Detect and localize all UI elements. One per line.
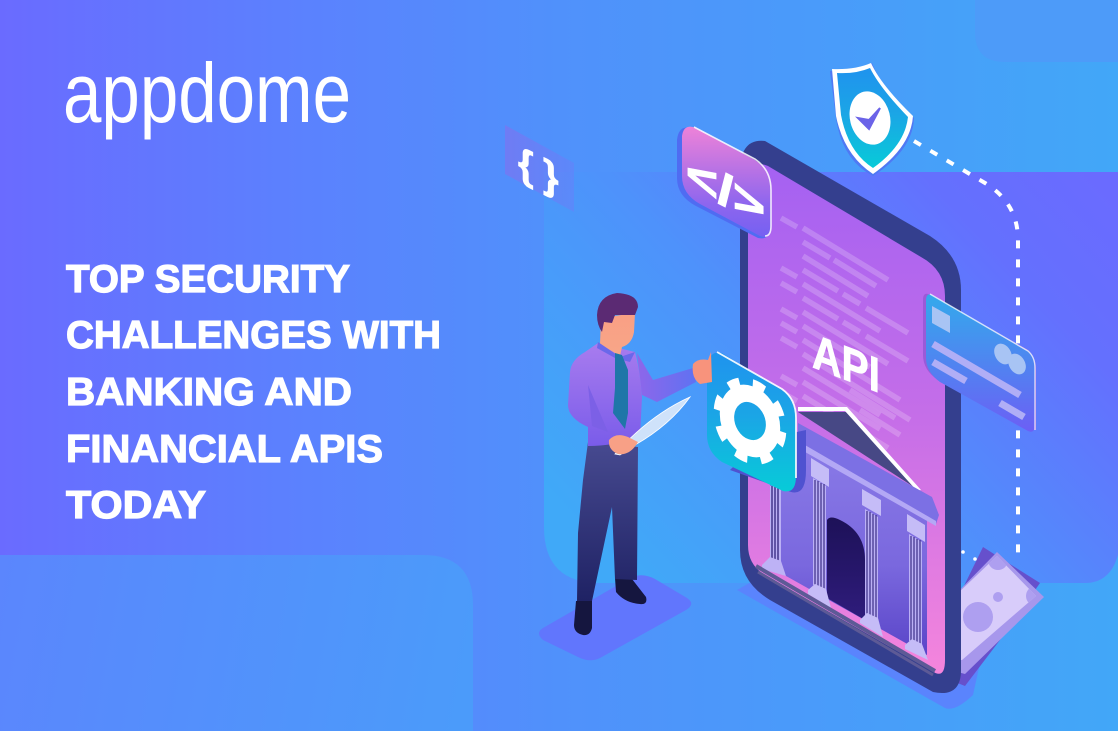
forearm xyxy=(637,353,696,402)
panel: central gradient block xyxy=(544,172,1118,583)
icon: code tile xyxy=(677,127,771,238)
hand on gear xyxy=(693,352,712,384)
column: second xyxy=(808,458,831,608)
code text lines on screen xyxy=(781,218,910,448)
gear xyxy=(716,374,784,468)
entablature xyxy=(798,423,939,524)
bank building xyxy=(756,407,939,675)
collar xyxy=(597,342,635,362)
title xyxy=(66,258,441,527)
icon: banknotes xyxy=(958,547,1044,686)
trousers xyxy=(577,442,638,601)
icon: curly braces tile: { xyxy=(518,138,534,190)
title: BANKING AND xyxy=(66,371,352,414)
logo: appdome: appdome xyxy=(63,46,351,140)
icon: curly braces tile: } xyxy=(543,150,559,202)
phone screen xyxy=(748,164,945,674)
phone screen label: API xyxy=(812,323,880,404)
man ground shadow xyxy=(539,575,691,660)
shoes xyxy=(615,578,646,604)
icon: curly braces tile xyxy=(505,125,574,212)
title: TOP SECURITY xyxy=(66,258,350,301)
column: first xyxy=(762,486,786,576)
pediment xyxy=(798,412,920,491)
neck and face xyxy=(600,313,635,356)
phone ground shadow xyxy=(737,560,985,709)
column: fourth xyxy=(905,514,928,660)
panel: bottom-left rounded block xyxy=(0,555,473,731)
title: FINANCIAL APIS xyxy=(66,428,383,471)
shirt xyxy=(568,343,642,446)
title: CHALLENGES WITH xyxy=(66,314,441,357)
title: TODAY xyxy=(66,484,206,527)
man xyxy=(568,293,712,635)
steps xyxy=(756,566,935,671)
icon: credit card xyxy=(923,294,1036,432)
tie xyxy=(613,353,628,429)
phone xyxy=(740,141,961,693)
building body xyxy=(770,430,927,655)
icon: gear tile xyxy=(707,352,806,492)
panel: top-right rounded block xyxy=(975,0,1118,62)
door xyxy=(827,518,865,620)
dashed connector line xyxy=(914,141,1018,562)
column: third xyxy=(860,489,883,637)
icon: code tile: </> xyxy=(686,146,765,237)
icon: security shield xyxy=(830,63,914,176)
phone body xyxy=(740,141,961,693)
hair xyxy=(597,293,638,332)
tablet xyxy=(615,397,690,455)
hand on tablet xyxy=(609,435,638,454)
